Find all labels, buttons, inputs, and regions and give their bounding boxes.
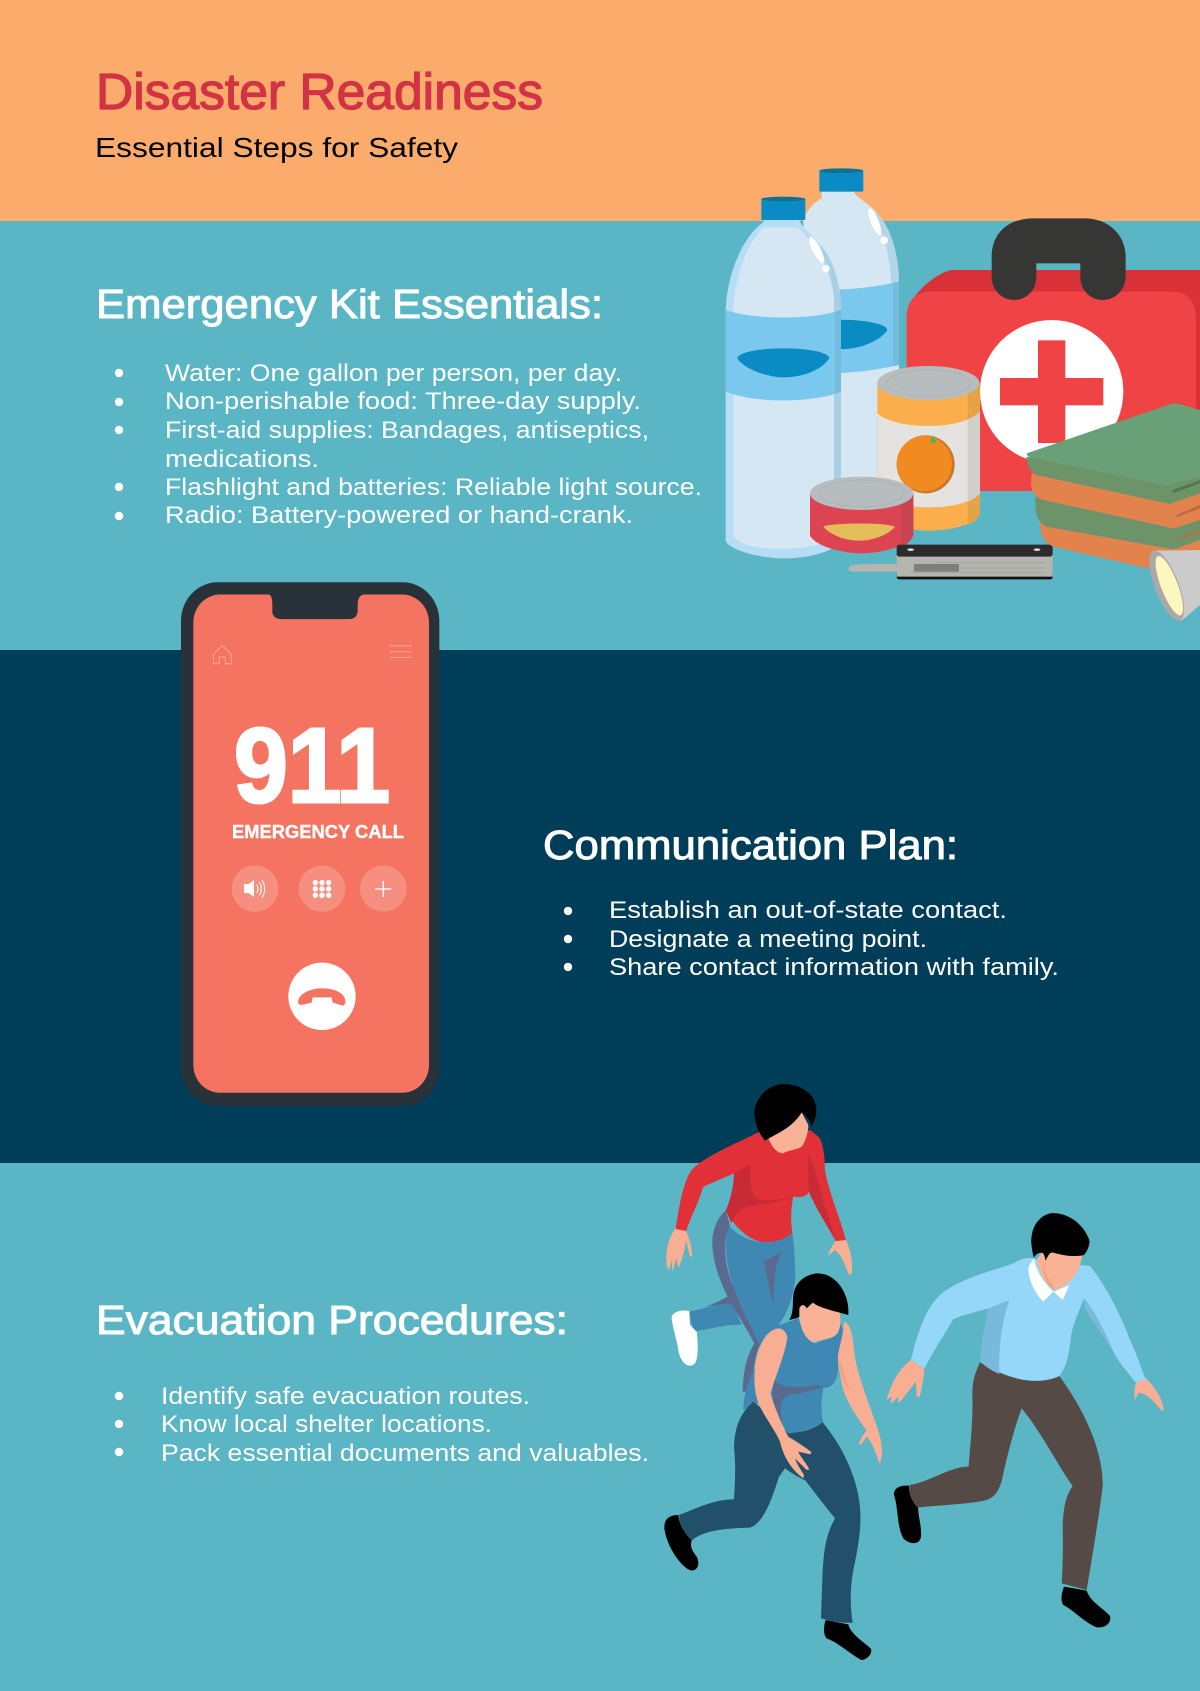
list: evacuation items: Pack essential documents and valuables. <box>161 1440 649 1467</box>
band: evacuation background <box>0 1163 1200 1691</box>
heading: emergency kit: Emergency Kit Essentials: <box>96 281 603 327</box>
list: emergency kit items: Non-perishable food: Three-day supply. <box>165 388 641 415</box>
list: evacuation items <box>115 1383 649 1467</box>
list: emergency kit items: Water: One gallon per person, per day. <box>165 360 622 387</box>
list: emergency kit items: First-aid supplies: Bandages, antiseptics, <box>165 417 649 444</box>
illustration: phone <box>181 582 439 1106</box>
icon: pocket knife <box>848 545 1053 579</box>
subtitle: Essential Steps for Safety <box>95 132 458 163</box>
text: emergency call: EMERGENCY CALL <box>232 822 404 842</box>
list: emergency kit items: medications. <box>165 446 319 473</box>
illustration: woman in red running <box>666 1084 852 1392</box>
band: communication plan background <box>0 650 1200 1163</box>
list: emergency kit items: Flashlight and batteries: Reliable light source. <box>165 474 702 501</box>
illustration: man running <box>887 1213 1164 1627</box>
icon: home <box>213 645 231 664</box>
list: communication items: Establish an out-of-state contact. <box>609 897 1007 924</box>
title: Disaster Readiness <box>96 63 543 120</box>
phone body and screen <box>181 582 439 1106</box>
list: emergency kit items <box>115 360 702 529</box>
list: evacuation items: Know local shelter locations. <box>161 1411 492 1438</box>
list: communication items: Designate a meeting point. <box>609 926 927 953</box>
icon: large food can <box>877 366 980 531</box>
icon: front water bottle <box>726 197 841 558</box>
list: communication items <box>564 897 1059 981</box>
illustration: woman in blue running <box>664 1273 882 1660</box>
heading: evacuation: Evacuation Procedures: <box>96 1297 568 1343</box>
icon: back water bottle <box>803 168 899 480</box>
band: emergency kit background <box>0 221 1200 650</box>
icon: menu <box>390 646 411 657</box>
text: 911: 911 <box>234 707 390 825</box>
button: end call <box>288 963 356 1030</box>
icon: flashlight <box>1142 547 1200 625</box>
list: emergency kit items: Radio: Battery-powered or hand-crank. <box>165 502 633 529</box>
icon: small food can <box>810 477 913 553</box>
heading: communication plan: Communication Plan: <box>543 822 958 868</box>
icon: first aid kit <box>907 218 1200 491</box>
list: communication items: Share contact information with family. <box>609 954 1059 981</box>
band: header background <box>0 0 1200 221</box>
illustration: emergency supplies <box>726 168 1200 625</box>
buttons: call controls <box>232 865 407 912</box>
icon: folded blankets <box>1027 403 1200 573</box>
list: evacuation items: Identify safe evacuation routes. <box>161 1383 530 1410</box>
